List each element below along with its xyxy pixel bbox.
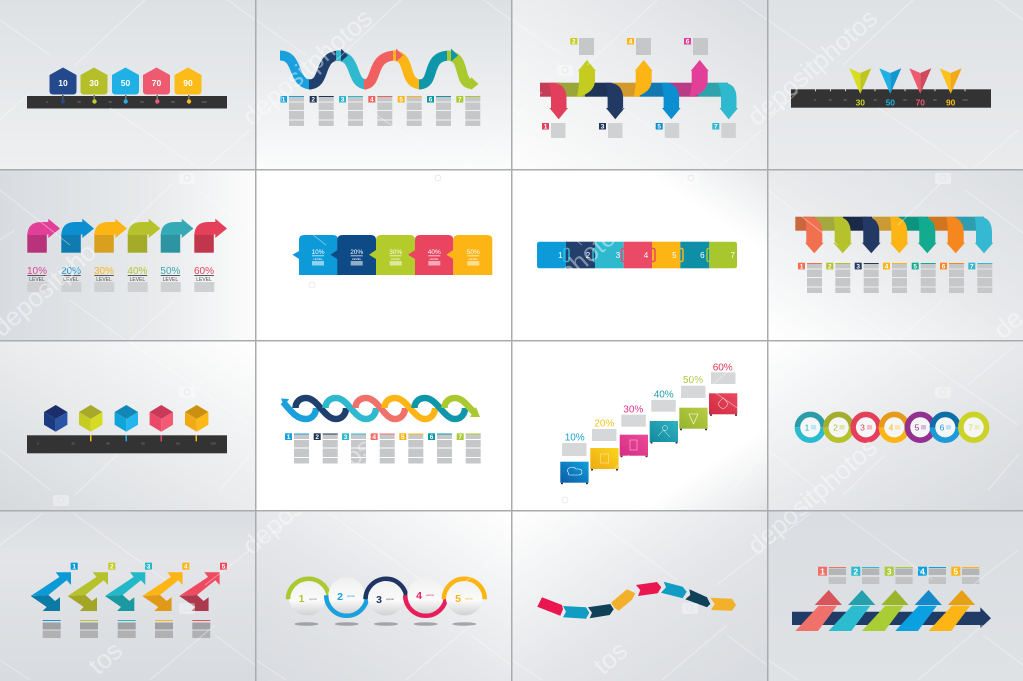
panel: interlaced wave [256,340,512,510]
watermark text: tos [587,635,633,681]
watermark text: depositphotos [236,432,378,561]
label 3 [599,123,622,138]
arrow 1 [805,217,824,253]
ring 3 [853,414,879,440]
ruler: 60 [141,442,145,446]
item 6 text [940,263,964,293]
arrow 4 [890,217,909,253]
step 7 text: 7 [458,97,462,104]
drop shadows [294,622,476,626]
item 7 text: 7 [970,263,974,270]
item 6 text: 6 [430,434,434,441]
item 6 text [428,433,452,464]
item 2 text [314,433,338,464]
cube blue [115,405,138,432]
circle 1: 1 [299,593,305,605]
chain segment 1 [537,597,563,616]
horizontal band [540,83,728,97]
level 60%: LEVEL [196,277,212,283]
ring 4: 4 [889,422,894,432]
label 1: 1 [820,566,825,576]
label 7 [712,123,736,138]
label 4 [918,566,946,584]
block 10%: 10% [311,249,325,256]
label 1: 1 [544,124,548,131]
item 3 text: 3 [856,263,860,270]
cube olive [79,405,102,432]
cube yellow [185,405,208,432]
hexagon 10 [50,68,76,94]
arrow 10% [27,219,60,253]
item 4 text: 4 [885,263,889,270]
level 60% [194,266,214,292]
level 50%: LEVEL [163,277,178,283]
strip numbers: 4 [644,251,649,260]
step 5 text [398,96,422,126]
item 5 text: 5 [913,263,917,270]
ring 3: 3 [860,422,865,432]
diagonal arrow 1 [795,590,842,631]
label 5: 5 [657,124,661,131]
text block 5 [192,620,210,638]
panel 5 background [0,170,256,340]
number badge 4: 4 [184,564,188,571]
hexagon 50 [112,68,139,94]
panel: circles with arcs [256,510,512,681]
block 20% [330,235,376,275]
panel: pointer scale [768,0,1023,170]
ruler bar [791,89,991,108]
item 1 text: 1 [800,263,804,270]
label 2 [851,566,879,584]
strip segments [537,242,737,268]
step 7 text [456,96,480,126]
arrow 60% [194,219,227,253]
chain segment 5 [636,582,661,596]
circle 5 [444,578,485,616]
scale bar [27,95,227,108]
label 3 [885,566,913,584]
ruler bar: 0 [814,98,816,102]
item 5 text: 5 [401,434,405,441]
pointer 50 [879,68,901,108]
chain segment 7 [685,589,710,607]
number badge 1 [71,563,78,571]
item 4 text [883,263,907,293]
scale bar: 20 [77,100,81,104]
ruler: 40 [106,442,110,446]
level 40% [127,266,148,292]
panel: linked rings [768,340,1023,510]
level 20%: 20% [61,266,81,277]
cube navy [44,405,67,432]
arrow 6 [946,217,965,253]
wave ribbon [280,48,478,90]
text block 3 [118,620,136,638]
block 10%: LEVEL [313,257,323,261]
strip numbers [558,251,735,260]
step 2 text: 2 [311,97,315,104]
label 5: 5 [953,566,958,576]
step 40% [650,389,678,444]
block 30%: LEVEL [391,257,401,261]
level 30%: LEVEL [96,277,112,283]
cube red [150,405,173,432]
block 50% [446,235,492,275]
ring 7 [961,414,986,440]
ring 1: 1 [805,422,810,432]
level 40%: 40% [127,266,148,277]
item 3 text [855,263,879,293]
circle 1 [288,578,329,616]
level 20% [61,266,81,292]
label 4 [627,38,651,55]
level 30% [94,266,114,292]
chain segment 4 [611,589,635,611]
step 20% [590,419,619,470]
block 50%: LEVEL [469,257,478,261]
arrow 7 [975,217,993,253]
arrow 3 down [606,83,625,119]
panel 1 background [0,0,256,170]
panel: cube scale [0,340,256,510]
scale bar: 40 [108,100,112,104]
label 1 [818,566,846,584]
ruler bar: 60 [903,98,907,102]
level 20%: LEVEL [63,277,79,283]
arrow 5 down [662,83,681,119]
item 2 text [826,263,850,293]
panel: numbered strip [512,170,768,340]
label 6: 6 [686,39,690,46]
step 5 text: 5 [399,97,403,104]
block 20%: 20% [350,249,363,256]
panel: curved arrows with levels [0,170,256,340]
level 10% [27,266,47,292]
level 50% [160,266,181,292]
item 2 text: 2 [315,434,319,441]
item 3 text: 3 [344,434,348,441]
step 4 text [368,96,392,126]
level 10%: LEVEL [29,277,45,283]
panel 7 background [512,170,768,340]
step 6 text: 6 [429,97,433,104]
arrow 30% [94,219,127,253]
panel 3 background [512,0,768,170]
item 5 text [399,433,423,464]
ruler: 100 [210,442,216,446]
chain segment 2 [563,606,589,619]
label 1 [542,123,566,138]
step 40%: 40% [654,389,674,400]
block 30% [369,235,415,275]
label 3: 3 [601,124,605,131]
circle 1: option [309,597,318,601]
ruler bar: 40 [873,98,877,102]
step 4 text: 4 [370,97,374,104]
circle 4 [405,578,446,616]
item 3 text [342,433,366,464]
number badge 5: 5 [222,564,226,571]
arrow 3 [862,217,881,253]
step 60%: 60% [713,363,733,374]
step 3 text [339,96,363,126]
arrow 1 down [549,83,568,119]
strip numbers: 3 [616,251,621,260]
strip numbers: 5 [672,251,677,260]
chain segment 3 [588,604,614,618]
panel 4 background [768,0,1023,170]
block 50%: 50% [467,249,480,256]
circle 3: 3 [376,594,382,606]
panel 11 background [512,340,768,510]
pointer 30: 30 [856,98,865,108]
ring 2: 2 [833,422,838,432]
chevron 4 [142,572,183,611]
label 2 [570,38,594,55]
diagonal arrow 2 [829,590,875,631]
arrow 2 up [577,60,596,97]
item 5 text [912,263,936,293]
item 1 text [285,433,309,464]
number badge 2: 2 [110,564,114,571]
chain segment 6 [661,582,687,598]
item 4 text: 4 [372,434,376,441]
chevron 3 [105,572,145,611]
label 3: 3 [887,566,892,576]
level 10%: 10% [27,266,47,277]
strip numbers: 6 [700,251,705,260]
pointer 50: 50 [886,98,895,108]
ring 5 [908,414,933,440]
panel: hexagon scale timeline [0,0,256,170]
ring 1 [798,414,823,440]
item 7 text [968,263,992,293]
number badge 4 [182,563,189,571]
panel: winding arrow chain [512,510,768,681]
arrow 40% [128,219,160,253]
chevron 2 [68,572,108,611]
watermark camera icons [53,65,951,614]
step 10% [560,433,589,484]
panel 14 background [256,510,512,681]
circle 5: 5 [455,593,461,605]
text block 2 [80,620,98,638]
hexagon 70 [143,68,170,94]
panel 16 background [768,510,1023,681]
chain segment 8 [710,598,736,611]
panel: tabbed blocks [256,170,512,340]
arrow 5 [918,217,937,253]
arrow 50% [161,219,193,253]
panel 12 background [768,340,1023,510]
interlaced ribbon [281,398,480,419]
step 50%: 50% [683,375,703,386]
panel 13 background [0,510,256,681]
block 20%: LEVEL [352,257,362,261]
circle 2: 2 [337,591,343,603]
item 1 text: 1 [287,434,291,441]
label 5 [656,123,679,138]
item 2 text: 2 [828,263,832,270]
block 40% [408,235,453,275]
number badge 3 [145,563,152,571]
block 10% [292,235,338,275]
circle 4: option [426,593,435,597]
pointer 30 [849,68,871,108]
long arrow [792,607,991,628]
panel: wave timeline [256,0,512,170]
hexagon 30 [80,68,108,94]
arrow 20% [61,219,94,253]
watermark text: depositphotos [236,3,378,132]
panel: chevron arrows [0,510,256,681]
label 6 [684,38,708,55]
circle 5: option [465,596,474,600]
watermark text: depositphotos [741,3,883,132]
circle 4: 4 [416,590,422,602]
ruler bar: 10 [828,98,832,102]
item 4 text [371,433,395,464]
pointer 70: 70 [916,98,925,108]
number badge 1: 1 [72,564,76,571]
label 2: 2 [572,39,576,46]
arrow band [795,217,984,231]
step 30% [620,404,648,457]
label 5 [951,566,979,584]
ring 4 [882,414,907,440]
item 7 text: 7 [458,434,462,441]
panel: diagonal arrows on band [768,510,1023,681]
panel 10 background [256,340,512,510]
step 30%: 30% [623,404,643,415]
panel: up and down arrow band [512,0,768,170]
scale bar: 60 [140,100,144,104]
panel: rising steps [512,340,768,510]
item 7 text [457,433,481,464]
level 40%: LEVEL [130,277,145,283]
circle 2 [326,578,367,616]
panel: seven down arrows [768,170,1023,340]
chevron 1 [31,572,71,611]
watermark text: depositphotos [489,214,631,343]
ring 7: 7 [968,422,973,432]
hexagon 50: 50 [121,78,130,88]
pointer 90: 90 [946,98,956,108]
step 2 text [310,96,334,126]
chevron 5 [179,572,220,611]
step 10%: 10% [565,433,585,444]
watermark text: tos [82,635,128,681]
step 1 text: 1 [282,97,286,104]
item 1 text [798,263,822,293]
level 50%: 50% [160,266,181,277]
level 30%: 30% [94,266,114,277]
scale bar: 0 [46,100,48,104]
block 30%: 30% [389,249,402,256]
ruler: 0 [37,442,39,446]
strip numbers: 1 [558,251,563,260]
circle 3 [366,578,406,616]
step 6 text [427,96,451,126]
panel 6 background [256,170,512,340]
label 7: 7 [714,124,718,131]
circle 3: option [386,597,395,601]
strip connectors [564,248,712,262]
panel 15 background [512,510,768,681]
hexagon 10: 10 [58,78,68,88]
ruler: 20 [71,442,75,446]
step 20%: 20% [594,419,614,430]
number badge 3: 3 [147,564,151,571]
ring 2 [826,414,852,440]
strip numbers: 2 [586,251,591,260]
ring 6: 6 [940,422,945,432]
hexagon 90 [174,68,202,94]
text block 1 [43,620,61,638]
arrow 2 [833,217,852,253]
ruler [27,435,227,453]
pointer 90 [940,68,962,108]
watermark text: depositphotos [741,432,883,561]
diagonal arrow 3 [862,590,909,631]
item 6 text: 6 [942,263,946,270]
arrow 7 down [718,83,738,119]
hexagon 90: 90 [183,78,193,88]
scale bar: 100 [201,100,207,104]
label 4: 4 [629,39,633,46]
hexagon 30: 30 [89,78,99,88]
block 40%: 40% [428,249,441,256]
number badge 5 [220,563,227,571]
ruler bar: 100 [962,98,968,102]
panel 2 background [256,0,512,170]
level 60%: 60% [194,266,214,277]
panel 8 background [768,170,1023,340]
panel 9 background [0,340,256,510]
arrow 6 up [690,60,709,97]
step 1 text [280,96,304,126]
block 40%: LEVEL [430,257,439,261]
step 3 text: 3 [341,97,345,104]
label 2: 2 [853,566,858,576]
pointer 70 [909,68,931,108]
label 4: 4 [920,566,925,576]
text block 4 [155,620,173,638]
ring 6 [932,414,958,440]
circle 2: option [347,594,356,598]
ring 5: 5 [915,422,920,432]
step 60% [709,363,737,416]
scale bar: 80 [171,100,175,104]
diagonal arrow 5 [928,590,975,631]
diagonal arrow 4 [895,590,942,631]
ruler bar: 20 [843,98,847,102]
step 50% [679,375,708,430]
ruler bar: 80 [933,98,937,102]
ruler: 80 [176,442,180,446]
hexagon 70: 70 [152,78,161,88]
number badge 2 [108,563,115,571]
strip numbers: 7 [730,251,735,260]
arrow 4 up [634,60,653,97]
